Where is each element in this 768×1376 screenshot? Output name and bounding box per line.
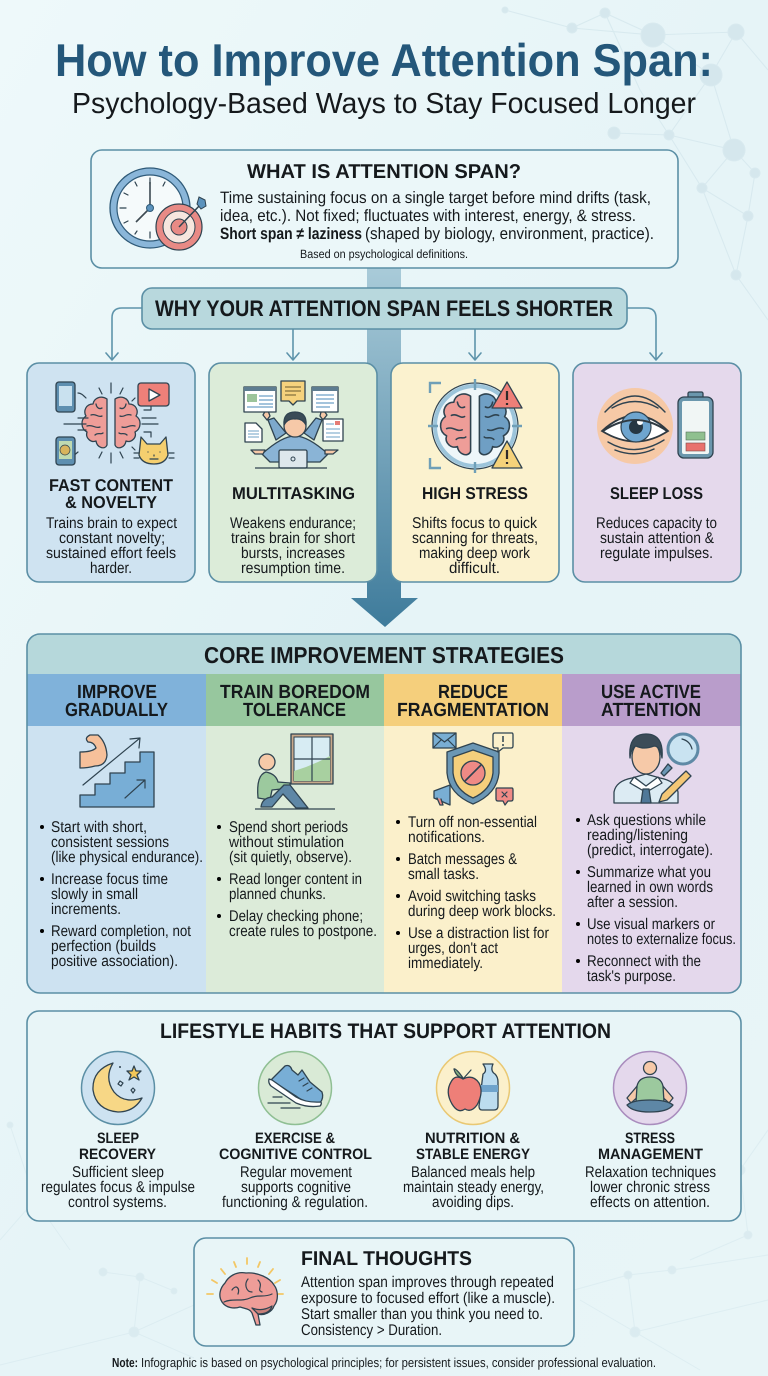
- bullet list: immediately.: [408, 955, 483, 972]
- bullet list: Start with short,: [51, 819, 147, 836]
- heading: CORE IMPROVEMENT STRATEGIES: [204, 642, 564, 668]
- icon: moon and stars: [82, 1052, 154, 1124]
- icon: person with magnifier and pencil: [614, 734, 698, 803]
- icon: tired eye and low battery: [597, 388, 713, 464]
- panel: final thoughts: [194, 1238, 574, 1346]
- closing text: Start smaller than you think you need to.: [301, 1306, 543, 1323]
- icon: muscle and stairs: [80, 735, 154, 807]
- panel: lifestyle habits: [27, 1011, 741, 1221]
- closing text: Consistency > Duration.: [301, 1322, 442, 1339]
- habit: exercise: functioning & regulation.: [222, 1194, 368, 1211]
- habit: stress management: Relaxation techniques: [585, 1164, 716, 1181]
- icon: running shoe: [258, 1052, 332, 1124]
- icon: shield blocking notifications: [433, 733, 513, 805]
- column: improve gradually: GRADUALLY: [65, 700, 168, 721]
- bullet list: urges, don't act: [408, 940, 499, 957]
- bullet list: Increase focus time: [51, 871, 168, 888]
- heading: FINAL THOUGHTS: [301, 1248, 472, 1270]
- bullet list: Batch messages &: [408, 851, 518, 868]
- bullet list: (sit quietly, observe).: [229, 849, 352, 866]
- description: constant novelty;: [59, 530, 165, 547]
- bullet list: notifications.: [408, 829, 485, 846]
- definition text: Short span ≠ laziness: [220, 225, 362, 243]
- description: resumption time.: [241, 560, 345, 577]
- habit: exercise: supports cognitive: [241, 1179, 351, 1196]
- description: regulate impulses.: [600, 545, 713, 562]
- bullet list: slowly in small: [51, 886, 138, 903]
- bullet list: Avoid switching tasks: [408, 888, 536, 905]
- panel header: [27, 634, 741, 674]
- title: How to Improve Attention Span:: [55, 34, 713, 86]
- habit: nutrition: STABLE ENERGY: [416, 1146, 530, 1163]
- column: use active attention: ATTENTION: [601, 700, 701, 721]
- icon: person at window: [255, 734, 335, 809]
- description: sustained effort feels: [46, 545, 176, 562]
- habit: exercise: Regular movement: [240, 1164, 353, 1181]
- footer note: Note:: [112, 1355, 138, 1370]
- heading: [49, 476, 174, 512]
- habit: exercise: COGNITIVE CONTROL: [219, 1146, 372, 1163]
- bullet list: (like physical endurance).: [51, 849, 203, 866]
- heading: FAST CONTENT: [49, 476, 174, 495]
- definition text: idea, etc.). Not fixed; fluctuates with interest, energy, & stress.: [220, 207, 636, 225]
- description: sustain attention &: [600, 530, 715, 547]
- description: bursts, increases: [241, 545, 345, 562]
- source note: Based on psychological definitions.: [300, 247, 468, 261]
- habit: nutrition: [403, 1052, 544, 1211]
- column: reduce fragmentation: FRAGMENTATION: [397, 700, 549, 721]
- habit: stress management: lower chronic stress: [590, 1179, 710, 1196]
- description: Shifts focus to quick: [412, 515, 537, 532]
- bullet list: perfection (builds: [51, 938, 156, 955]
- card: fast content and novelty: [27, 363, 195, 582]
- bullet list: Spend short periods: [229, 819, 348, 836]
- bullet list: [217, 819, 377, 940]
- bullet list: [396, 814, 556, 972]
- footer note: Infographic is based on psychological principles; for persistent issues, consider professional evaluation.: [141, 1355, 656, 1370]
- bullet list: learned in own words: [587, 879, 713, 896]
- habit: stress management: STRESS: [625, 1130, 675, 1147]
- bullet list: reading/listening: [587, 827, 688, 844]
- description: [596, 515, 717, 562]
- habit: sleep recovery: [41, 1052, 195, 1211]
- icon: glowing brain: [207, 1258, 283, 1325]
- heading: MULTITASKING: [232, 484, 355, 503]
- bullet list: Delay checking phone;: [229, 908, 363, 925]
- bullet list: notes to externalize focus.: [587, 931, 736, 948]
- description: Weakens endurance;: [230, 515, 356, 532]
- column: train boredom tolerance: [206, 674, 384, 993]
- panel: core improvement strategies: [27, 634, 741, 993]
- habit: nutrition: maintain steady energy,: [403, 1179, 544, 1196]
- closing text: exposure to focused effort (like a muscle).: [301, 1290, 555, 1307]
- column: train boredom tolerance: TOLERANCE: [243, 700, 346, 721]
- description: trains brain for short: [231, 530, 356, 547]
- bullet list: during deep work blocks.: [408, 903, 556, 920]
- description: scanning for threats,: [412, 530, 538, 547]
- section banner: why shorter: [142, 288, 627, 329]
- card: multitasking: [209, 363, 377, 582]
- definition text: (shaped by biology, environment, practice).: [365, 225, 654, 243]
- bullet list: create rules to postpone.: [229, 923, 377, 940]
- column: improve gradually: [27, 674, 206, 993]
- habit: sleep recovery: Sufficient sleep: [72, 1164, 164, 1181]
- bullet list: positive association).: [51, 953, 178, 970]
- column: train boredom tolerance: TRAIN BOREDOM: [220, 682, 370, 703]
- icon: meditating person: [614, 1052, 686, 1124]
- habit: exercise: [219, 1052, 372, 1211]
- column: reduce fragmentation: [384, 674, 562, 993]
- bullet list: Read longer content in: [229, 871, 362, 888]
- icon: clock and target: [110, 168, 206, 250]
- description: harder.: [90, 560, 132, 577]
- bullet list: (predict, interrogate).: [587, 842, 713, 859]
- bullet list: increments.: [51, 901, 121, 918]
- heading: WHAT IS ATTENTION SPAN?: [247, 161, 521, 183]
- column: use active attention: [562, 674, 741, 993]
- central flow arrow: [351, 268, 418, 627]
- panel: what is attention span: [91, 150, 678, 268]
- connector arrows: [106, 308, 662, 360]
- column: reduce fragmentation: REDUCE: [438, 682, 508, 703]
- definition text: Time sustaining focus on a single target before mind drifts (task,: [220, 189, 651, 207]
- bullet list: after a session.: [587, 894, 678, 911]
- heading: LIFESTYLE HABITS THAT SUPPORT ATTENTION: [160, 1020, 611, 1043]
- heading: SLEEP LOSS: [610, 484, 703, 503]
- column: improve gradually: IMPROVE: [77, 682, 157, 703]
- card: sleep loss: [573, 363, 741, 582]
- habit: exercise: EXERCISE &: [255, 1130, 335, 1147]
- bullet list: [576, 812, 736, 985]
- icon: brain with media distractions: [56, 382, 174, 465]
- bullet list: Use visual markers or: [587, 916, 715, 933]
- habit: nutrition: NUTRITION &: [425, 1130, 520, 1147]
- bullet list: without stimulation: [228, 834, 344, 851]
- description: [46, 515, 178, 577]
- habit: stress management: [585, 1052, 716, 1211]
- description: difficult.: [449, 560, 500, 577]
- heading: HIGH STRESS: [422, 484, 528, 503]
- bullet list: Reward completion, not: [51, 923, 192, 940]
- habit: sleep recovery: RECOVERY: [79, 1146, 156, 1163]
- habit: stress management: effects on attention.: [590, 1194, 710, 1211]
- icon: person multitasking: [244, 381, 343, 468]
- icon: stressed brain with warnings: [428, 379, 522, 473]
- heading: & NOVELTY: [65, 493, 158, 512]
- description: making deep work: [419, 545, 530, 562]
- habit: sleep recovery: SLEEP: [97, 1130, 139, 1147]
- bullet list: consistent sessions: [51, 834, 169, 851]
- section banner: why shorter: WHY YOUR ATTENTION SPAN FEELS SHORTER: [155, 296, 613, 321]
- description: [412, 515, 538, 577]
- habit: nutrition: Balanced meals help: [411, 1164, 535, 1181]
- description: Trains brain to expect: [46, 515, 178, 532]
- subtitle: Psychology-Based Ways to Stay Focused Longer: [72, 88, 696, 120]
- column: use active attention: USE ACTIVE: [601, 682, 701, 703]
- bullet list: Summarize what you: [587, 864, 711, 881]
- bullet list: small tasks.: [408, 866, 479, 883]
- closing text: Attention span improves through repeated: [301, 1274, 554, 1291]
- bullet list: Ask questions while: [587, 812, 706, 829]
- bullet list: [40, 819, 203, 970]
- habit: sleep recovery: control systems.: [68, 1194, 167, 1211]
- definition text: [220, 189, 654, 243]
- habit: nutrition: avoiding dips.: [432, 1194, 514, 1211]
- card: high stress: [391, 363, 559, 582]
- description: Reduces capacity to: [596, 515, 717, 532]
- bullet list: planned chunks.: [229, 886, 326, 903]
- habit: stress management: MANAGEMENT: [598, 1146, 703, 1163]
- bullet list: task's purpose.: [587, 968, 676, 985]
- closing text: [301, 1274, 555, 1339]
- icon: apple and water bottle: [436, 1052, 510, 1124]
- bullet list: Turn off non-essential: [408, 814, 537, 831]
- bullet list: Use a distraction list for: [408, 925, 549, 942]
- habit: sleep recovery: regulates focus & impulse: [41, 1179, 195, 1196]
- description: [230, 515, 356, 577]
- bullet list: Reconnect with the: [587, 953, 701, 970]
